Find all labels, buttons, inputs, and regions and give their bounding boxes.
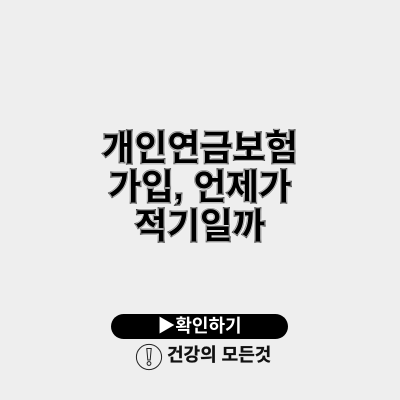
button: 확인하기: ▶확인하기 — [157, 316, 242, 336]
icon: exclamation in circle — [136, 344, 162, 370]
title: 가입, 언제가 — [108, 167, 292, 207]
title: 적기일까 — [135, 206, 265, 246]
caption: 건강의 모든것: 건강의 모든것 — [167, 345, 271, 365]
button: 확인하기 — [111, 314, 288, 339]
title: 개인연금보험 — [102, 128, 298, 168]
title — [101, 128, 298, 246]
